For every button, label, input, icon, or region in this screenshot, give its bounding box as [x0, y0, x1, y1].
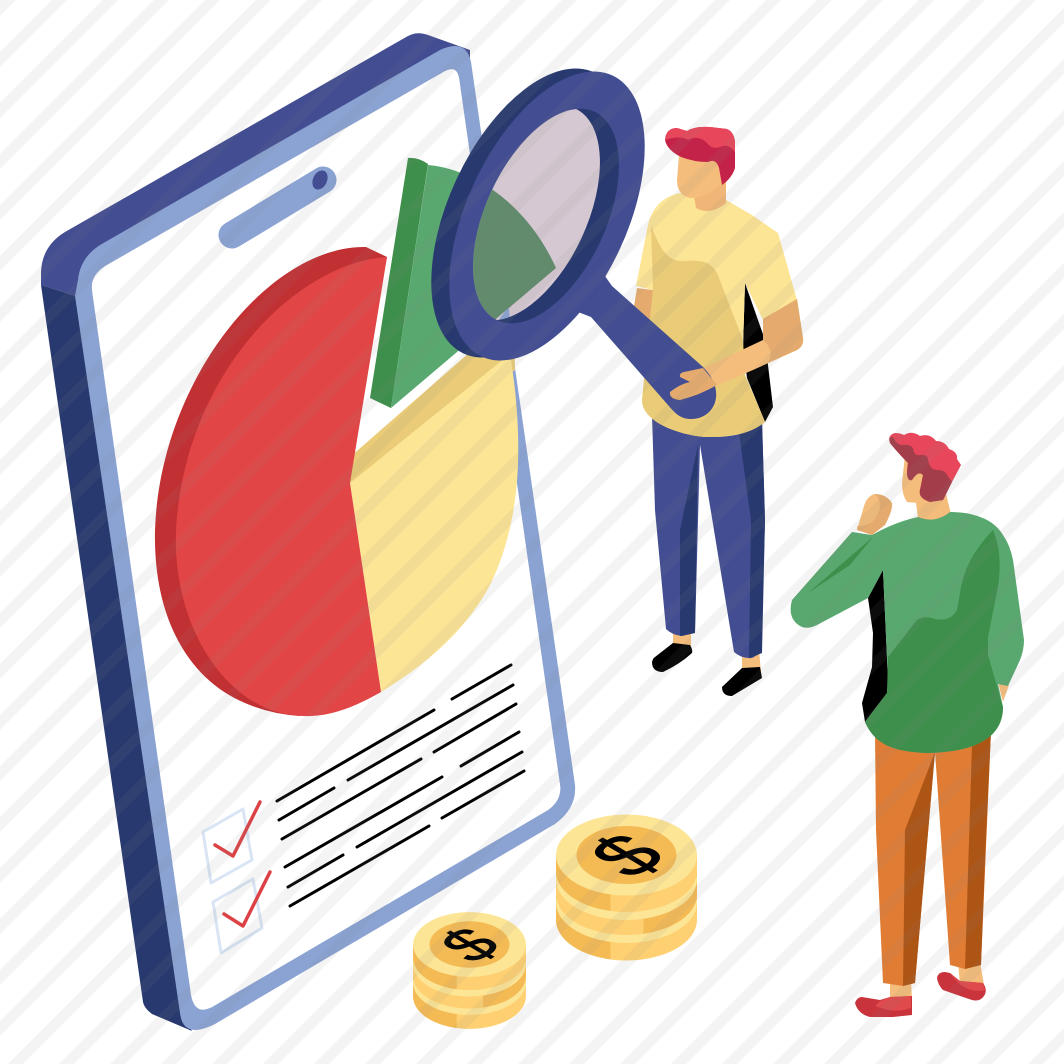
elbow shading — [763, 299, 803, 363]
ankles — [890, 962, 984, 1000]
shoes — [652, 643, 692, 672]
hidden hand — [998, 682, 1009, 702]
checklist — [203, 802, 270, 953]
large coin stack: $ — [570, 822, 683, 889]
pie chart — [155, 158, 556, 716]
sweater — [791, 512, 1024, 753]
magnifying glass — [431, 68, 717, 419]
black bag — [743, 283, 773, 422]
hand fingers over handle — [670, 368, 717, 400]
large coin stack — [556, 814, 697, 960]
neck — [693, 180, 726, 211]
lens — [473, 109, 600, 320]
phone frame — [75, 46, 575, 1030]
camera dot — [309, 168, 331, 192]
phone — [41, 33, 575, 1031]
handle — [578, 262, 716, 419]
small coin stack — [413, 912, 526, 1029]
shoes — [855, 972, 986, 1017]
far arm — [634, 288, 653, 322]
man with magnifier — [634, 127, 803, 696]
magnified green slice — [473, 190, 556, 320]
speaker pill — [232, 180, 323, 235]
rim inner wall — [443, 86, 649, 346]
trousers — [652, 415, 765, 658]
frame seen through lens — [499, 308, 510, 320]
ankles — [673, 630, 761, 672]
small coin stack: $ — [425, 918, 515, 972]
man with green sweater — [791, 433, 1024, 1017]
t-shirt — [636, 193, 797, 437]
face — [902, 455, 925, 503]
sweater shading — [865, 530, 1003, 753]
black side — [862, 570, 888, 722]
yellow slice — [350, 338, 518, 692]
red slice — [155, 247, 387, 716]
rim back — [391, 39, 667, 387]
hair — [665, 127, 735, 185]
sleeve fold — [808, 537, 873, 593]
text lines — [277, 665, 524, 906]
rim front — [409, 42, 685, 390]
phone screen — [92, 69, 560, 1010]
checkbox 1 — [203, 802, 260, 883]
t-shirt shading — [642, 225, 765, 437]
phone body left side — [41, 285, 192, 1031]
neck — [915, 490, 951, 521]
trousers — [875, 730, 991, 986]
forearm — [670, 299, 803, 400]
phone body top edge — [41, 33, 470, 296]
fist — [857, 494, 892, 535]
face — [677, 155, 722, 198]
hair — [889, 433, 961, 502]
checkbox 2 — [213, 872, 270, 953]
green slice — [370, 158, 556, 408]
